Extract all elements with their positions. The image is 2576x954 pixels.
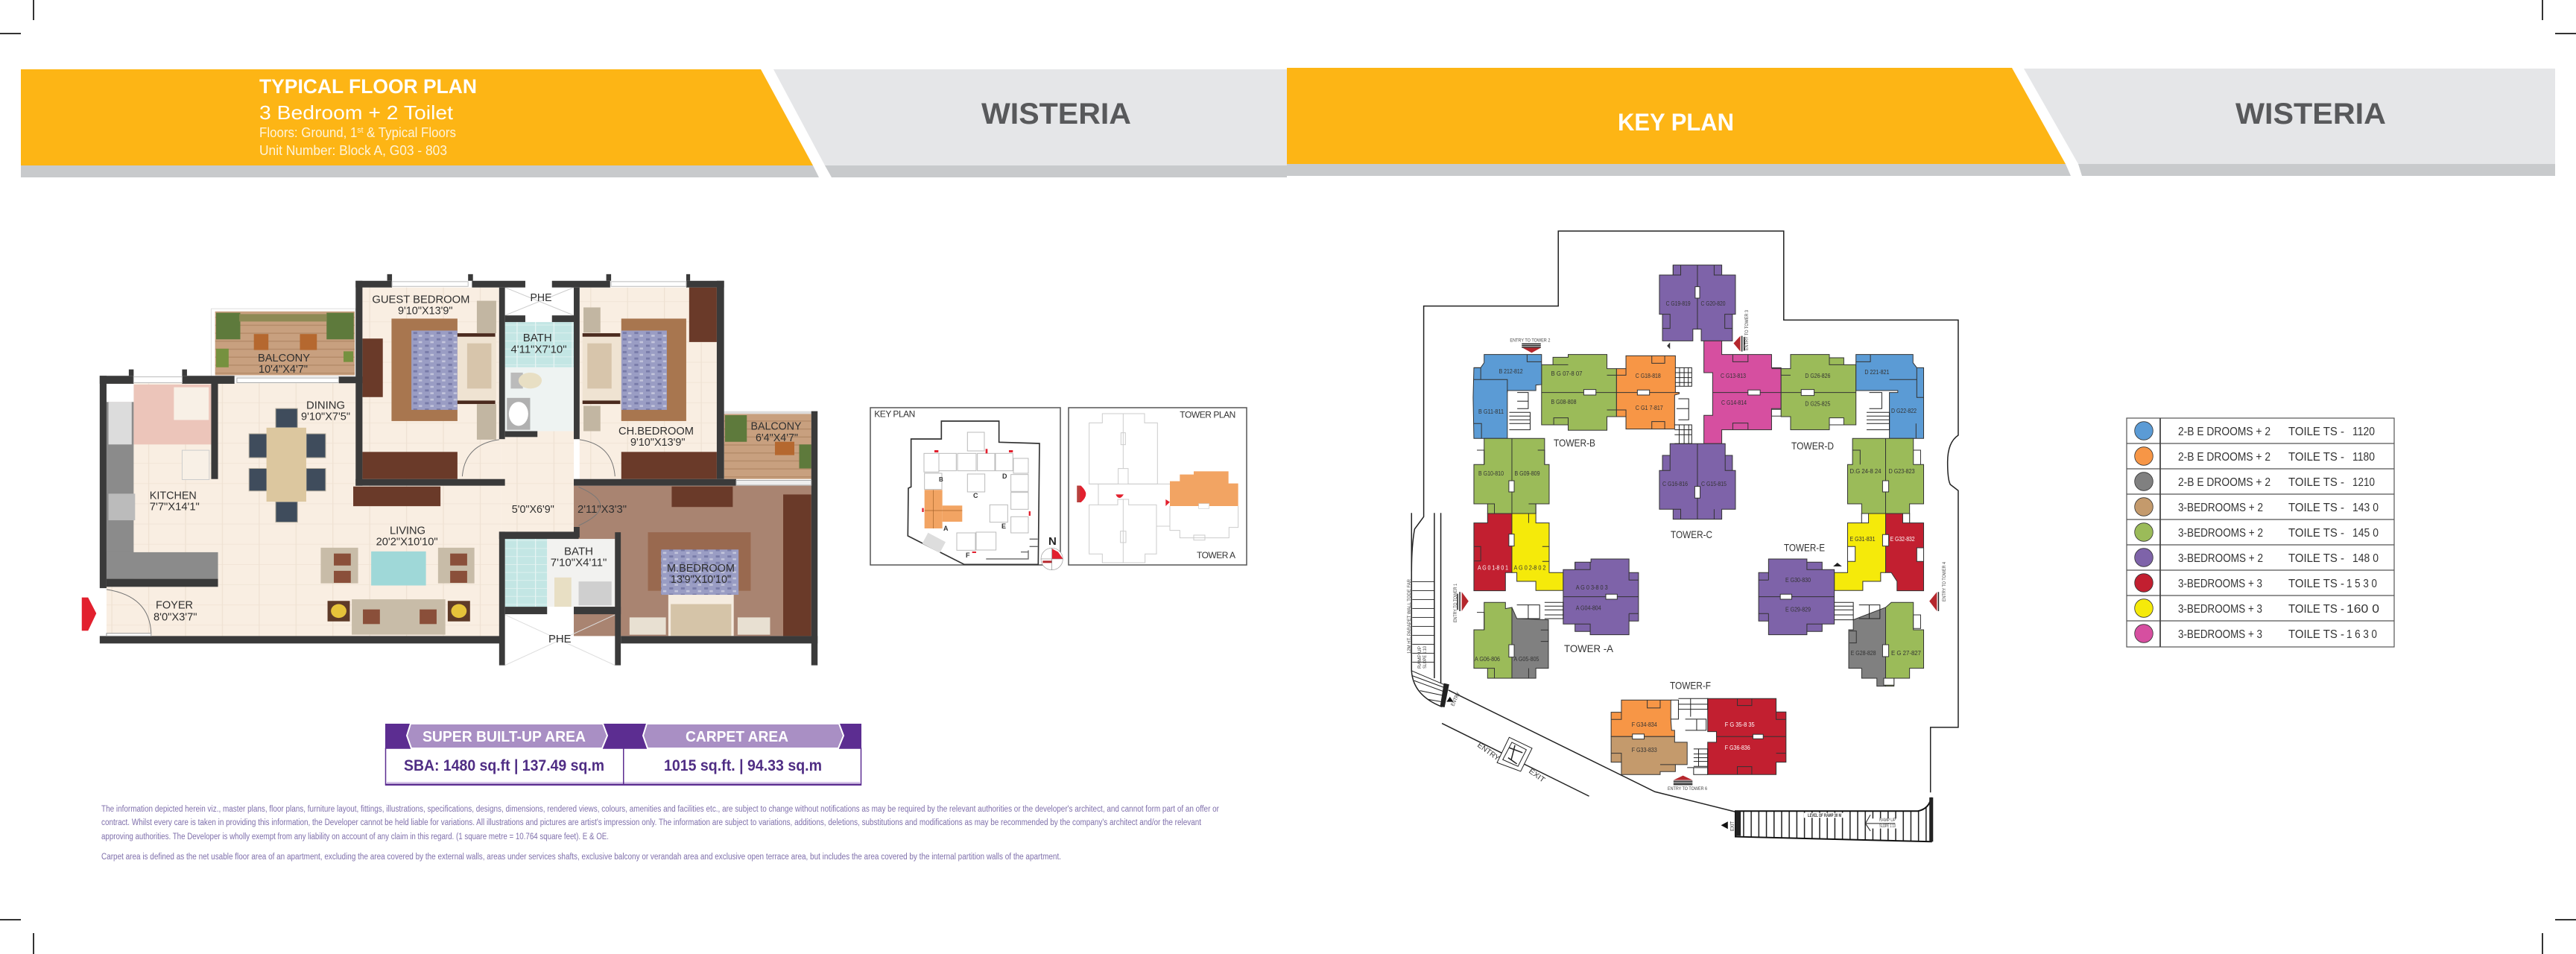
legend row 8 [2135, 599, 2379, 617]
room labels: BALCONY [751, 420, 802, 433]
unit labels: F G 35-8 35 [1725, 721, 1755, 728]
core details [1509, 367, 1890, 774]
unit labels: A G 0 1-8 0 1 [1478, 564, 1508, 572]
header: wisteria left: WISTERIA [981, 98, 1131, 130]
room labels: 9'10"X7'5" [301, 410, 350, 423]
header: wisteria right: WISTERIA [2235, 98, 2386, 130]
mini key plan: A [943, 525, 949, 532]
unit labels: D G22-822 [1891, 407, 1917, 414]
legend row 9: TOILE TS - [2288, 628, 2344, 641]
unit labels: B 212-812 [1499, 367, 1523, 375]
wardrobes [353, 288, 811, 636]
header: typical floor plan [21, 69, 819, 177]
header: key plan [1287, 68, 2071, 176]
living furniture [320, 548, 358, 584]
walls [100, 274, 817, 666]
legend row 1: 2-B E DROOMS + 2 [2178, 426, 2270, 438]
legend row 2: TOILE TS - [2288, 451, 2344, 464]
unit labels: A G04-804 [1576, 604, 1601, 612]
room labels: PHE [531, 291, 551, 304]
legend row 3: 2-B E DROOMS + 2 [2178, 476, 2270, 489]
unit labels: C G13-813 [1721, 372, 1746, 379]
tower c orange [1616, 356, 1679, 429]
tower a green [1474, 602, 1512, 678]
balconies [211, 309, 355, 376]
mini tower plan: TOWER A [1197, 550, 1235, 560]
header: wisteria left [773, 69, 1287, 177]
legend row 8: TOILE TS - [2288, 603, 2344, 616]
unit labels: C G1 7-817 [1636, 404, 1663, 411]
room labels: LIVING [390, 525, 425, 537]
tower f orange [1611, 700, 1674, 736]
unit labels: E G32-832 [1890, 535, 1915, 543]
entry and exit labels: ENTRY TO TOWER 1 [1453, 584, 1458, 622]
room labels: 7'10"X4'11" [551, 556, 607, 569]
rugs and beds [391, 318, 458, 421]
entry and exit labels: ENTRY [1450, 692, 1461, 707]
legend row 1: 1120 [2352, 426, 2375, 438]
legend row 2: 1180 [2352, 451, 2375, 464]
tower labels: TOWER-E [1784, 541, 1825, 553]
carpet area tab [643, 724, 844, 748]
unit labels: B G11-811 [1478, 408, 1504, 415]
unit labels: E G30-830 [1785, 576, 1811, 584]
legend row 8: 160 0 [2346, 603, 2379, 616]
legend row 2 [2135, 447, 2375, 465]
unit labels: D 221-821 [1864, 368, 1890, 376]
entry and exit labels: ENTRY TO TOWER 3 [1744, 310, 1750, 350]
unit labels: A G 0 2-8 0 2 [1514, 564, 1546, 572]
mini key plan: D [1002, 473, 1007, 480]
tower f red [1708, 698, 1786, 774]
tower labels: TOWER-D [1791, 440, 1834, 452]
room labels: 8'0"X3'7" [154, 611, 197, 624]
tower d blue [1856, 355, 1924, 438]
floors text: & Typical Floors [363, 125, 456, 140]
unit labels: C G15-815 [1701, 480, 1727, 487]
bath fixtures [507, 398, 530, 430]
tower e red [1886, 514, 1924, 591]
tower a yellow [1512, 514, 1563, 590]
unit labels: E G29-829 [1785, 606, 1811, 613]
entry and exit labels: ENTRY TO TOWER 4 [1942, 562, 1947, 601]
unit configuration: 3 Bedroom + 2 Toilet [259, 101, 454, 124]
disclaimer: Carpet area is defined as the net usable floor area of an apartment, excluding the area covered by the external walls, areas under services shafts, exclusive balcony or verandah area and exclusive open terrace area, but includes the area covered by the internal partition walls of the apartment. [101, 853, 1061, 862]
unit labels: E G 27-827 [1891, 649, 1921, 657]
room labels: CH.BEDROOM [618, 425, 694, 437]
tower c pink [1704, 341, 1781, 443]
mini key plan: C [973, 492, 978, 499]
mini key plan: N [1048, 535, 1057, 548]
tower b green lower [1474, 438, 1549, 514]
legend [2127, 418, 2394, 647]
unit labels: B G08-808 [1551, 398, 1577, 405]
legend row 6 [2135, 549, 2379, 566]
site drawing [1411, 231, 1958, 842]
room labels [150, 291, 802, 645]
legend row 5: 3-BEDROOMS + 2 [2178, 527, 2263, 540]
legend row 4: TOILE TS - [2288, 502, 2344, 514]
legend row 9: 1 6 3 0 [2346, 628, 2377, 641]
unit labels: B G10-810 [1478, 470, 1504, 477]
tower c lower purple [1659, 443, 1735, 519]
legend row 6: 148 0 [2352, 552, 2379, 565]
super built-up tab [407, 724, 607, 748]
entry and exit labels: ENTRY TO TOWER 6 [1668, 786, 1707, 792]
entry arrows [1458, 336, 1938, 785]
legend row 9 [2135, 625, 2377, 642]
unit labels: D G26-826 [1805, 372, 1831, 379]
tower d green lower [1847, 438, 1924, 514]
tower a red [1474, 514, 1512, 591]
room labels: KITCHEN [150, 489, 197, 502]
room labels: 7'7"X14'1" [150, 501, 200, 513]
mini tower plan: TOWER PLAN [1180, 410, 1235, 420]
unit labels: F G34-834 [1632, 721, 1657, 728]
super built-up tab: SUPER BUILT-UP AREA [423, 729, 586, 745]
unit labels: C G16-816 [1662, 480, 1688, 487]
floor plan drawing [82, 274, 817, 666]
tower a purple [1563, 559, 1639, 635]
entry and exit labels: LEVEL OF RAMP 30 M [1808, 813, 1841, 818]
room labels: FOYER [156, 599, 193, 612]
legend row 5: 145 0 [2352, 527, 2379, 540]
tower labels: TOWER-F [1670, 679, 1711, 691]
kitchen [133, 385, 211, 444]
entry and exit labels: ENTRY [1475, 742, 1501, 763]
mini key plan [870, 408, 1063, 570]
unit labels: A G 0 3-8 0 3 [1576, 584, 1608, 591]
entry and exit labels: EXIT [1730, 821, 1735, 831]
entry and exit labels: 12M HT. PARAPET WALL TODE FAR [1407, 579, 1412, 654]
legend row 1: TOILE TS - [2288, 426, 2344, 438]
icon: entrance arrow [82, 598, 96, 631]
unit labels: D G25-825 [1805, 399, 1831, 407]
unit labels: B G09-809 [1514, 470, 1540, 477]
room labels: 13'9"X10'10" [671, 573, 731, 586]
header: wisteria right [2024, 69, 2555, 176]
legend row 4: 3-BEDROOMS + 2 [2178, 502, 2263, 514]
unit labels: B G 07-8 07 [1551, 370, 1583, 377]
entry and exit labels: EXIT [1527, 768, 1546, 785]
site key plan [1407, 231, 1958, 842]
room labels: PHE [548, 633, 571, 645]
header: key plan: KEY PLAN [1618, 109, 1734, 136]
mini key plan: B [939, 476, 943, 483]
legend row 7: TOILE TS - [2288, 578, 2344, 590]
room labels: 20'2"X10'10" [376, 535, 438, 548]
room labels: GUEST BEDROOM [372, 293, 469, 306]
room labels: 5'0"X6'9" [512, 503, 554, 516]
tower labels [1554, 437, 1834, 691]
highlighted unit [1170, 471, 1238, 506]
room labels: 9'10"X13'9" [398, 304, 453, 317]
legend row 8: 3-BEDROOMS + 3 [2178, 603, 2262, 616]
unit number text: Unit Number: Block A, G03 - 803 [259, 143, 447, 158]
sba value: SBA: 1480 sq.ft | 137.49 sq.m [404, 757, 604, 774]
legend row 7: 3-BEDROOMS + 3 [2178, 578, 2262, 590]
legend row 3: TOILE TS - [2288, 476, 2344, 489]
unit labels: D.G 24-8 24 [1849, 467, 1882, 475]
tower e grey [1849, 607, 1886, 686]
bottom ramp [1721, 797, 1933, 842]
disclaimer: contract. Whilst every care is taken in providing this information, the Developer cannot be held liable for variations. All illustrations and pictures are artist's impression only. The information are subject to variations, additions, deletions, substitutions and modifications as may be recommended by the company's architect and/or the relevant [101, 818, 1202, 827]
legend row 5 [2135, 523, 2379, 541]
disclaimer: approving authorities. The Developer is wholly exempt from any liability on account of any claim in this regard. (1 square metre = 10.764 square feet). E & OE. [101, 833, 609, 841]
room labels: M.BEDROOM [667, 562, 735, 575]
tower b blue [1473, 355, 1542, 438]
room labels: 2'11"X3'3" [577, 503, 627, 516]
mini site drawing [908, 421, 1063, 570]
compass [1041, 548, 1063, 570]
room labels: 6'4"X4'7" [756, 432, 798, 444]
carpet value: 1015 sq.ft. | 94.33 sq.m [664, 757, 822, 774]
tower e purple [1759, 559, 1835, 635]
unit labels: C G19-819 [1666, 300, 1691, 307]
tower b green [1542, 355, 1616, 430]
room labels: BATH [523, 332, 552, 344]
unit labels: F G36-836 [1725, 744, 1750, 751]
unit labels: E G31-831 [1849, 535, 1876, 543]
entry and exit labels: SLOPE 1:10 [1423, 646, 1428, 669]
floors text: st [357, 126, 363, 135]
road and gate [1442, 724, 1589, 796]
tower d green [1781, 355, 1856, 430]
legend row 3: 1210 [2352, 476, 2375, 489]
heading: typical floor plan: TYPICAL FLOOR PLAN [259, 75, 477, 98]
room labels: 10'4"X4'7" [259, 363, 308, 376]
unit labels: A G05-805 [1514, 655, 1539, 663]
room labels: 9'10"X13'9" [630, 436, 686, 449]
legend row 7 [2135, 574, 2377, 592]
unit labels: A G06-806 [1475, 655, 1500, 663]
carpet area tab: CARPET AREA [686, 729, 788, 745]
disclaimer [101, 805, 1219, 862]
tower labels: TOWER-C [1671, 528, 1712, 540]
tower f tan [1611, 736, 1687, 774]
legend row 7: 1 5 3 0 [2346, 578, 2377, 590]
unit labels: E G28-828 [1851, 649, 1876, 657]
entry and exit labels: RAMP UP [1417, 646, 1423, 669]
legend row 9: 3-BEDROOMS + 3 [2178, 628, 2262, 641]
room labels: DINING [306, 399, 345, 411]
tower c top purple [1659, 265, 1735, 341]
unit labels: D G23-823 [1889, 467, 1915, 475]
unit labels: C G18-818 [1636, 372, 1661, 379]
dining [249, 408, 326, 522]
entry and exit labels [1407, 310, 1947, 831]
room labels: 4'11"X7'10" [511, 343, 566, 356]
tower labels: TOWER -A [1564, 642, 1614, 654]
highlighted tower a [925, 490, 962, 528]
disclaimer: The information depicted herein viz., master plans, floor plans, furniture layout, fittings, illustrations, specifications, designs, dimensions, rendered views, colours, amenities and facilities etc., are subject to change without notifications as may be required by the relevant authorities or the developer's architect, and cannot form part of an offer or [101, 805, 1219, 814]
entry and exit labels: ENTRY TO TOWER 2 [1510, 338, 1551, 344]
legend row 4: 143 0 [2352, 502, 2379, 514]
entry and exit labels: RAMP UP [1879, 818, 1896, 823]
mini key plan: F [966, 552, 970, 559]
legend row 6: TOILE TS - [2288, 552, 2344, 565]
room labels: BATH [564, 546, 593, 557]
legend row 6: 3-BEDROOMS + 2 [2178, 552, 2263, 565]
room labels: BALCONY [258, 352, 310, 364]
unit labels [1475, 300, 1921, 754]
left ramp [1411, 513, 1453, 707]
unit labels: C G14-814 [1721, 399, 1747, 406]
mini tower plan [1069, 408, 1247, 565]
legend row 3 [2135, 473, 2375, 490]
tower labels: TOWER-B [1554, 437, 1595, 449]
entry and exit labels: SLOPE 1:10 [1879, 824, 1896, 829]
floors text: Floors: Ground, 1 [259, 125, 364, 140]
unit labels: C G20-820 [1700, 300, 1726, 307]
legend row 1 [2135, 422, 2375, 440]
legend row 5: TOILE TS - [2288, 527, 2344, 540]
tower a grey [1512, 607, 1548, 678]
mini key plan: KEY PLAN [874, 408, 915, 419]
tower e green [1886, 602, 1924, 686]
tower e yellow [1835, 514, 1886, 590]
mini key plan: E [1001, 522, 1006, 530]
unit labels: F G33-833 [1632, 746, 1657, 754]
legend row 4 [2135, 498, 2379, 516]
site boundary [1411, 231, 1958, 812]
legend row 2: 2-B E DROOMS + 2 [2178, 451, 2270, 464]
floor plan [82, 274, 817, 666]
area table [385, 724, 861, 786]
